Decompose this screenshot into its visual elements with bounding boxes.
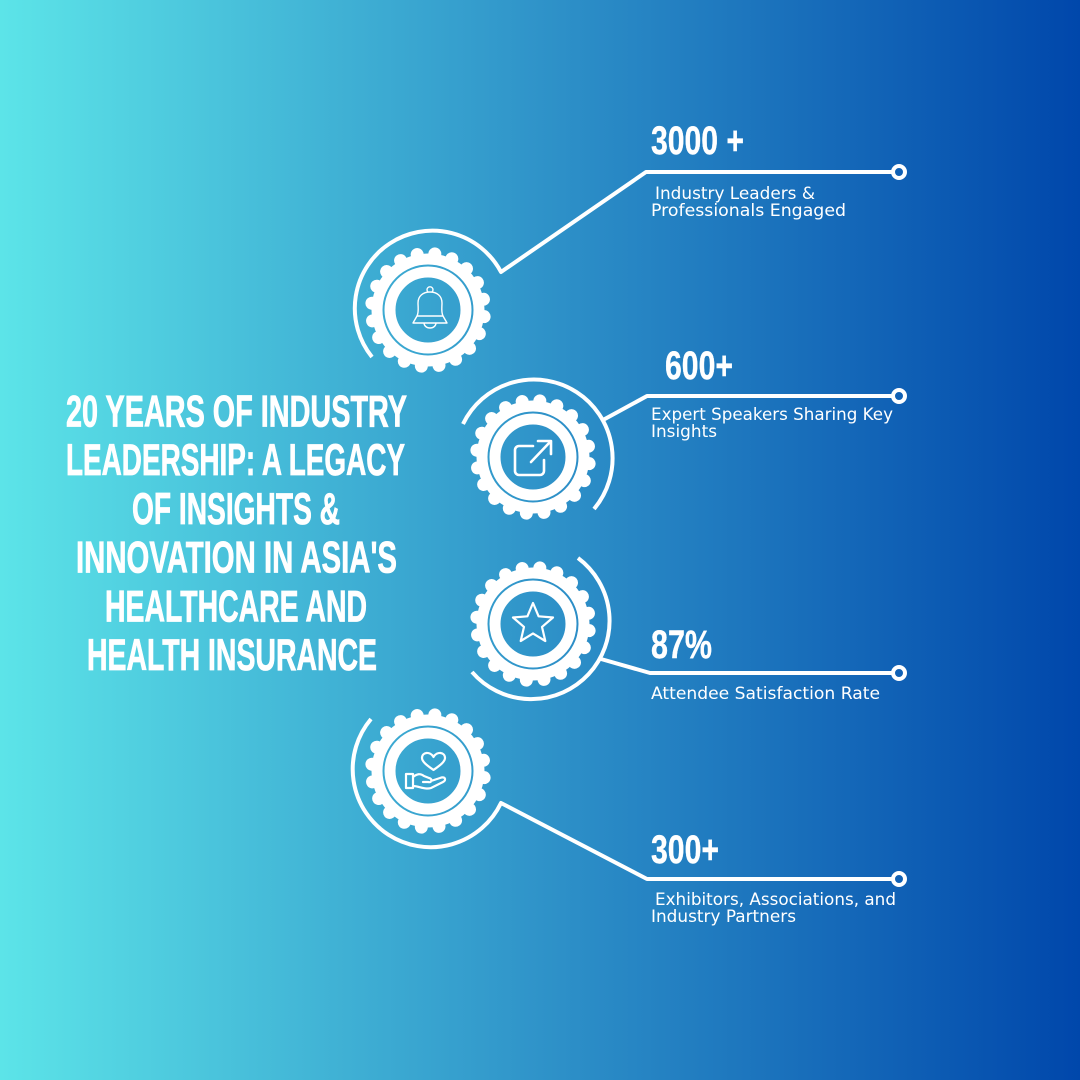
- description 2: Insights: [651, 422, 717, 441]
- title: [66, 388, 407, 680]
- connector line 3: [601, 659, 893, 673]
- gear 4: [365, 708, 491, 834]
- description 4: Exhibitors, Associations, and: [655, 890, 896, 909]
- arc 2: [463, 380, 613, 509]
- description 1: Professionals Engaged: [651, 201, 846, 220]
- stat 1: [651, 119, 846, 220]
- title: HEALTH INSURANCE: [87, 631, 377, 680]
- title: OF INSIGHTS &: [132, 485, 340, 534]
- gear item 2: external link: [463, 380, 905, 520]
- stat 1: 3000 +: [651, 119, 744, 163]
- stat 2: [651, 344, 893, 441]
- stat 2: 600+: [665, 344, 733, 388]
- title: 20 YEARS OF INDUSTRY: [66, 388, 407, 436]
- icon: star: [513, 603, 553, 641]
- stat 3: [651, 623, 880, 703]
- connector line 2: [603, 396, 893, 420]
- endpoint 4: [893, 873, 905, 885]
- gear 3: [470, 561, 596, 687]
- stat 3: 87%: [651, 623, 712, 667]
- gear item 4: hand with heart: [353, 708, 905, 885]
- stat 4: 300+: [651, 828, 719, 872]
- description 2: [651, 405, 893, 441]
- description 4: Industry Partners: [651, 907, 796, 926]
- gear 1: [365, 247, 491, 373]
- gear item 3: star: [470, 558, 905, 699]
- description 3: Attendee Satisfaction Rate: [651, 684, 880, 703]
- gear item 1: bell: [355, 166, 905, 373]
- arc and connector 4: [353, 719, 893, 879]
- endpoint 2: [893, 390, 905, 402]
- title: HEALTHCARE AND: [105, 582, 367, 631]
- description 4: [651, 890, 896, 926]
- arc and connector 1: [355, 172, 893, 357]
- title: LEADERSHIP: A LEGACY: [66, 436, 405, 485]
- endpoint 1: [893, 166, 905, 178]
- gear 2: [470, 394, 596, 520]
- description 1: [651, 184, 846, 220]
- endpoint 3: [893, 667, 905, 679]
- icon: hand with heart: [406, 753, 445, 789]
- description 1: Industry Leaders &: [655, 184, 815, 203]
- icon: bell: [413, 287, 447, 328]
- title: INNOVATION IN ASIA'S: [76, 534, 397, 583]
- icon: external link: [515, 441, 551, 475]
- stat 4: [651, 828, 896, 926]
- arc 3: [472, 558, 610, 699]
- description 2: Expert Speakers Sharing Key: [651, 405, 893, 424]
